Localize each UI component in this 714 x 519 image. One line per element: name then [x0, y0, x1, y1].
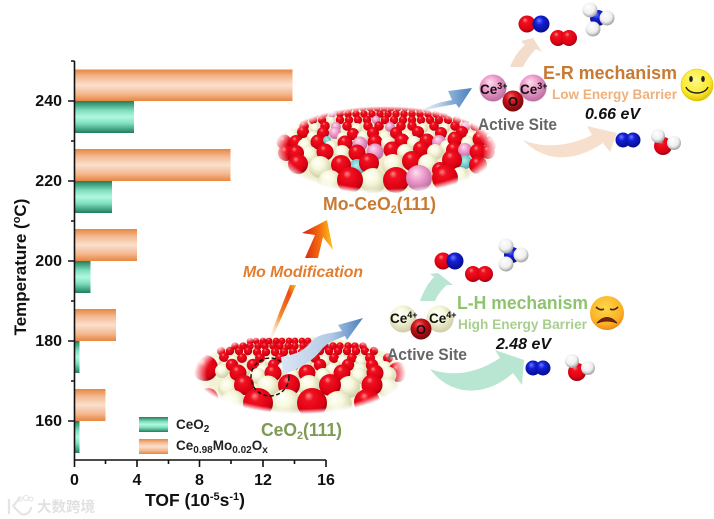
- dashed circle: active site: [251, 358, 289, 396]
- arrow: products: [430, 350, 524, 391]
- legend: 0.02: [232, 445, 252, 456]
- bars: Ce0.98Mo0.02Ox: [75, 70, 292, 421]
- y tick labels: [35, 93, 62, 430]
- icon: smiley: [681, 69, 713, 101]
- x axis title: TOF (10: [145, 490, 210, 510]
- y tick labels: 220: [35, 173, 62, 190]
- heading: E-R mechanism: E-R mechanism: [543, 62, 677, 83]
- arrow: reactants up: [510, 38, 542, 67]
- label: Active Site: Active Site: [387, 346, 467, 364]
- Mo-CeO2(111) lattice surface: [275, 104, 498, 194]
- label: Mo-CeO2(111): Mo-CeO: [323, 194, 392, 214]
- legend: [139, 417, 268, 456]
- x axis title: s: [220, 490, 230, 510]
- active site: Ce3+ O Ce3+: 3+: [497, 81, 508, 91]
- active site: Ce4+ O Ce4+: Ce: [429, 311, 446, 326]
- x axis title: -5: [210, 491, 220, 503]
- molecule: NO: [518, 16, 550, 32]
- y tick labels: 240: [35, 93, 62, 110]
- label: Low Energy Barrier: Low Energy Barrier: [552, 86, 678, 102]
- y axis title: o: [11, 216, 23, 223]
- label: Mo-CeO2(111): (111): [397, 194, 436, 214]
- axes and ticks: [68, 61, 326, 467]
- x tick labels: 8: [195, 472, 204, 489]
- CeO2(111) lattice surface: [192, 337, 408, 419]
- active site: Ce3+ O Ce3+: Ce: [480, 82, 497, 97]
- molecule: O2: [465, 266, 493, 282]
- arrow: reactants up: [420, 273, 453, 301]
- label: CeO2(111): (111): [303, 420, 342, 440]
- y tick labels: 200: [35, 253, 62, 270]
- arrow: Mo modification: [268, 220, 333, 341]
- arrow: lower blue wavy arrow: [281, 318, 363, 375]
- watermark: 大数跨境: [37, 498, 95, 516]
- molecule: H2O: [565, 354, 595, 381]
- legend: O: [252, 438, 262, 453]
- bar chart: TOF vs temperature: [11, 61, 335, 510]
- label: CeO2(111): CeO: [261, 420, 298, 440]
- active site: Ce3+ O Ce3+: O: [508, 94, 518, 109]
- active site: Ce4+ O Ce4+: 4+: [446, 310, 457, 320]
- x tick labels: 4: [133, 472, 142, 489]
- arrow: products: [523, 126, 617, 157]
- label: High Energy Barrier: High Energy Barrier: [458, 316, 588, 332]
- arrow: upper blue arrow: [420, 88, 472, 112]
- legend: Ce: [176, 438, 193, 453]
- active site: Ce3+ O Ce3+: [480, 74, 548, 112]
- value: 0.66 eV: 0.66 eV: [585, 106, 642, 123]
- active site: Ce3+ O Ce3+: 3+: [537, 81, 548, 91]
- y axis title: C): [11, 199, 30, 217]
- y tick labels: 180: [35, 333, 62, 350]
- x axis title: ): [239, 490, 245, 510]
- molecule: NO: [434, 252, 464, 270]
- x tick labels: 0: [70, 472, 79, 489]
- label: CeO2(111): 2: [297, 430, 303, 442]
- legend: Mo: [213, 438, 232, 453]
- x tick labels: 16: [317, 472, 335, 489]
- molecule: N2: [526, 360, 550, 376]
- legend: x: [262, 445, 268, 456]
- x tick labels: [70, 472, 335, 489]
- molecule: H2O: [651, 129, 681, 155]
- x tick labels: 12: [254, 472, 272, 489]
- active site: Ce4+ O Ce4+: Ce: [390, 311, 407, 326]
- legend: 2: [204, 424, 210, 435]
- x axis title: -1: [229, 491, 239, 503]
- y axis title: Temperature (: [11, 223, 30, 335]
- icon: sad face: [590, 296, 624, 330]
- active site: Ce3+ O Ce3+: Ce: [520, 82, 537, 97]
- label: Mo Modification: Mo Modification: [243, 264, 363, 281]
- panel: E-R mechanism: [478, 2, 713, 157]
- molecule: O2: [550, 30, 577, 46]
- molecule: NH3: [582, 2, 614, 36]
- panel: L-H mechanism: [387, 238, 624, 391]
- active site: Ce4+ O Ce4+: [390, 306, 457, 340]
- molecule: NH3: [498, 238, 528, 272]
- active site: Ce4+ O Ce4+: 4+: [407, 310, 418, 320]
- label: Active Site: Active Site: [478, 116, 557, 134]
- molecule: N2: [616, 132, 640, 148]
- watermark: [9, 495, 95, 516]
- value: 2.48 eV: 2.48 eV: [495, 336, 553, 353]
- legend: CeO: [176, 417, 204, 432]
- active site: Ce4+ O Ce4+: O: [416, 322, 426, 337]
- heading: L-H mechanism: L-H mechanism: [457, 292, 588, 313]
- bars: CeO2: [75, 101, 134, 453]
- y tick labels: 160: [35, 413, 62, 430]
- legend: 0.98: [193, 445, 213, 456]
- label: Mo-CeO2(111): 2: [391, 204, 397, 216]
